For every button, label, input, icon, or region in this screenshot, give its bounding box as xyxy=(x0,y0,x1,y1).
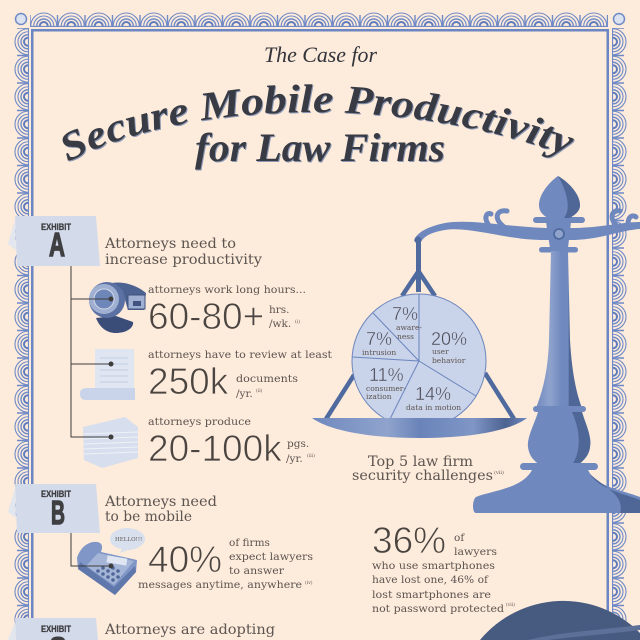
pie chart caption: (vii) xyxy=(494,469,504,476)
fact: documents reviewed: 250k xyxy=(148,361,229,402)
fact: expected availability: expect lawyers xyxy=(229,551,313,563)
pie: consumerization 11% xyxy=(366,365,406,401)
icon: stack of paper xyxy=(83,417,138,468)
scale: bulb xyxy=(528,412,590,465)
fact: expected availability: of firms xyxy=(229,537,270,549)
title: second line: for Law Firms xyxy=(195,125,445,170)
icon: scroll document xyxy=(80,349,135,400)
fact: expected availability: (iv) xyxy=(305,579,313,586)
icon: office phone with speech bubble: HELLO!!! xyxy=(115,537,142,543)
fact: expected availability: 40% xyxy=(148,539,222,580)
pie: awareness 7%: ness xyxy=(397,332,414,341)
pie: awareness 7% xyxy=(392,304,422,341)
pie chart caption: security challenges xyxy=(352,468,493,484)
exhibit A heading xyxy=(104,236,262,268)
pie: consumerization 11%: 11% xyxy=(369,365,404,385)
fact: lost smartphones: lawyers xyxy=(454,546,497,558)
fact: documents reviewed: documents xyxy=(236,373,298,385)
fact: pages produced xyxy=(148,416,315,469)
title: arched line: Secure Mobile Productivity xyxy=(62,84,575,162)
title: kicker: The Case for xyxy=(264,42,377,67)
fact: lost smartphones xyxy=(372,520,515,615)
exhibit B heading xyxy=(104,494,217,525)
pie: data in motion 14% xyxy=(406,384,461,412)
pie: awareness 7%: 7% xyxy=(392,304,418,324)
fact: lost smartphones: have lost one, 46% of xyxy=(372,574,489,586)
fact: pages produced: (iii) xyxy=(307,452,315,459)
connector: exhibit A to facts xyxy=(71,266,114,440)
exhibit B tag: B xyxy=(51,494,65,531)
pie: intrusion 7%: intrusion xyxy=(362,348,396,357)
fact: long hours: attorneys work long hours... xyxy=(148,284,306,296)
exhibit A tag: A xyxy=(49,226,65,263)
fact: pages produced: pgs. xyxy=(287,438,309,450)
fact: long hours: hrs. xyxy=(269,304,290,316)
fact: long hours: (i) xyxy=(295,318,300,325)
exhibit C tag: EXHIBIT xyxy=(41,624,71,635)
fact: lost smartphones: not password protected xyxy=(372,603,504,615)
pie: user behavior 20%: behavior xyxy=(432,356,466,365)
pie: intrusion 7% xyxy=(362,329,396,357)
fact: long hours: 60-80+ xyxy=(148,296,264,337)
scale: finial xyxy=(539,176,580,218)
fact: lost smartphones: (vii) xyxy=(506,601,515,608)
pie: consumerization 11%: consumer- xyxy=(366,384,406,393)
fact: pages produced: /yr. xyxy=(286,453,303,465)
fact: pages produced: attorneys produce xyxy=(148,416,251,428)
icon: office phone with speech bubble xyxy=(77,528,145,595)
fact: long hours xyxy=(148,284,306,337)
fact: lost smartphones: of xyxy=(454,532,465,544)
scale: collar xyxy=(533,406,586,412)
fact: lost smartphones: lost smartphones are xyxy=(372,589,491,601)
exhibit C heading: Attorneys are adopting xyxy=(104,622,275,638)
exhibit A heading: Attorneys need to xyxy=(104,236,236,252)
pie: intrusion 7%: 7% xyxy=(366,329,392,349)
scale: pan xyxy=(312,418,527,438)
exhibit A tag xyxy=(8,216,100,266)
exhibit A heading: increase productivity xyxy=(105,252,262,268)
illustration: scale of justice xyxy=(326,176,640,513)
fact: expected availability: messages anytime, anywhere xyxy=(138,579,302,591)
pie chart caption xyxy=(352,454,504,484)
fact: long hours: /wk. xyxy=(269,318,291,330)
pie chart: top 5 law firm security challenges xyxy=(352,294,486,428)
pie: data in motion 14%: 14% xyxy=(415,384,451,404)
exhibit B tag xyxy=(8,484,100,533)
exhibit B tag: EXHIBIT xyxy=(41,489,71,500)
scale: pivot ring and cross bars xyxy=(533,217,585,252)
exhibit A tag: EXHIBIT xyxy=(41,222,71,233)
pie: user behavior 20%: user xyxy=(432,347,449,356)
fact: lost smartphones: who use smartphones xyxy=(372,560,495,572)
exhibit B heading: to be mobile xyxy=(105,509,192,525)
connector: exhibit B to fact xyxy=(71,533,114,568)
pie: awareness 7%: aware- xyxy=(396,323,422,332)
exhibit C tag xyxy=(8,618,98,640)
scale: hanger rod and chains xyxy=(326,240,514,419)
scale: base xyxy=(473,470,640,513)
scale: beam ornaments xyxy=(486,211,636,226)
fact: documents reviewed xyxy=(148,349,333,402)
scale: column xyxy=(536,251,582,408)
pie chart caption: Top 5 law firm xyxy=(368,454,473,470)
title xyxy=(62,42,575,170)
fact: documents reviewed: /yr. xyxy=(236,388,253,400)
illustration: dark device at page bottom xyxy=(480,601,640,640)
fact: documents reviewed: (ii) xyxy=(256,387,263,394)
scale: beam xyxy=(414,222,640,242)
fact: documents reviewed: attorneys have to review at least xyxy=(148,349,333,361)
fact: expected availability: to answer xyxy=(229,565,285,577)
pie: data in motion 14%: data in motion xyxy=(406,403,461,412)
fact: expected availability xyxy=(138,537,313,591)
exhibit B heading: Attorneys need xyxy=(104,494,217,510)
pie: user behavior 20% xyxy=(431,329,467,365)
fact: lost smartphones: 36% xyxy=(372,520,446,561)
fact: pages produced: 20-100k xyxy=(148,428,282,469)
pie: consumerization 11%: ization xyxy=(366,392,392,401)
pie: user behavior 20%: 20% xyxy=(431,329,467,349)
icon: wristwatch xyxy=(89,282,146,333)
